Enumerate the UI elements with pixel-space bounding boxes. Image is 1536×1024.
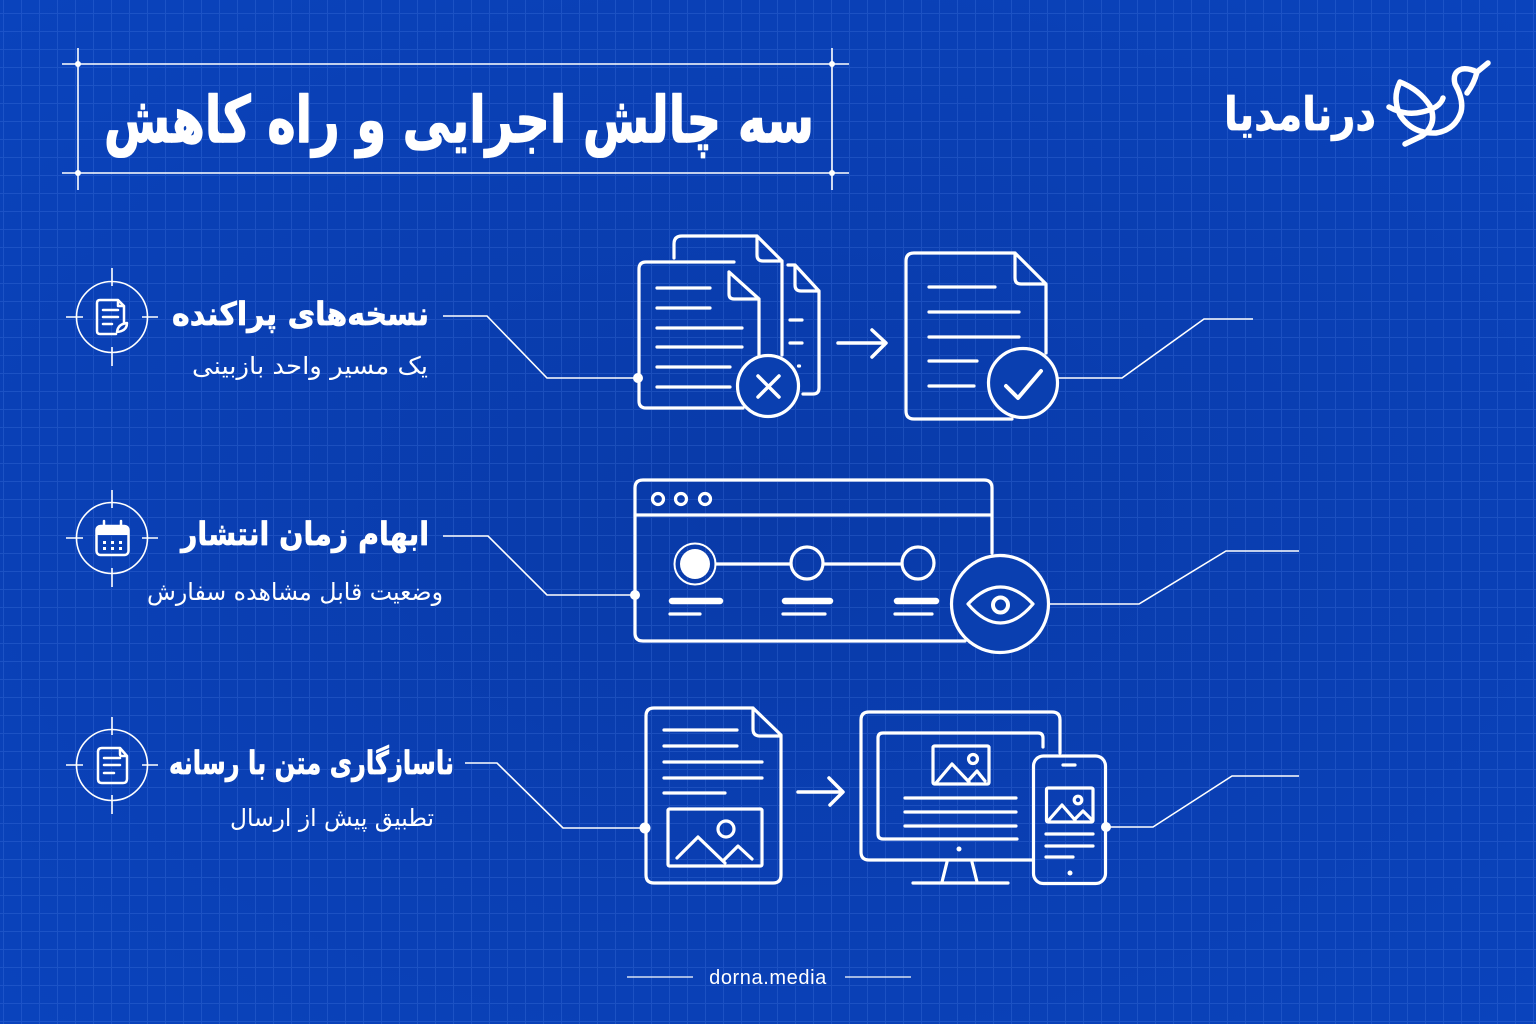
row 1 arrow bbox=[838, 330, 886, 357]
row 3 monitor and phone bbox=[861, 712, 1106, 884]
row 3 right connector bbox=[1101, 776, 1299, 832]
row 1 scattered documents with x badge bbox=[639, 236, 819, 416]
row 3 subheading: تطبیق پیش از ارسال bbox=[230, 804, 434, 832]
title: سه چالش اجرایی و راه کاهش bbox=[104, 84, 814, 158]
logo bbox=[1224, 63, 1488, 144]
row 3 arrow bbox=[798, 778, 843, 805]
row 1 left connector bbox=[443, 316, 643, 383]
footer url: dorna.media bbox=[709, 967, 827, 989]
row 1 icon: notes document in target circle bbox=[66, 268, 158, 366]
row 2 icon: calendar in target circle bbox=[66, 490, 158, 587]
logo wordmark: درنامدیا bbox=[1224, 87, 1376, 141]
logo bird mark bbox=[1389, 63, 1488, 144]
row 1 right connector bbox=[1058, 319, 1253, 378]
title frame bbox=[62, 48, 849, 190]
row 1 subheading: یک مسیر واحد بازبینی bbox=[192, 352, 428, 380]
row 2 subheading: وضعیت قابل مشاهده سفارش bbox=[147, 578, 443, 606]
row 2 browser window with status timeline and eye badge bbox=[635, 480, 1048, 652]
row 3 icon: document in target circle bbox=[66, 717, 158, 814]
row 2 heading: ابهام زمان انتشار bbox=[179, 515, 429, 553]
row 3 document with image bbox=[646, 708, 781, 883]
row 1 single document with check badge bbox=[906, 253, 1058, 419]
row 3 heading: ناسازگاری متن با رسانه bbox=[169, 744, 454, 782]
row 2 left connector bbox=[443, 536, 640, 600]
row 2 right connector bbox=[1050, 551, 1299, 604]
row 1 heading: نسخه‌های پراکنده bbox=[172, 295, 429, 333]
row 3 left connector bbox=[465, 763, 650, 834]
